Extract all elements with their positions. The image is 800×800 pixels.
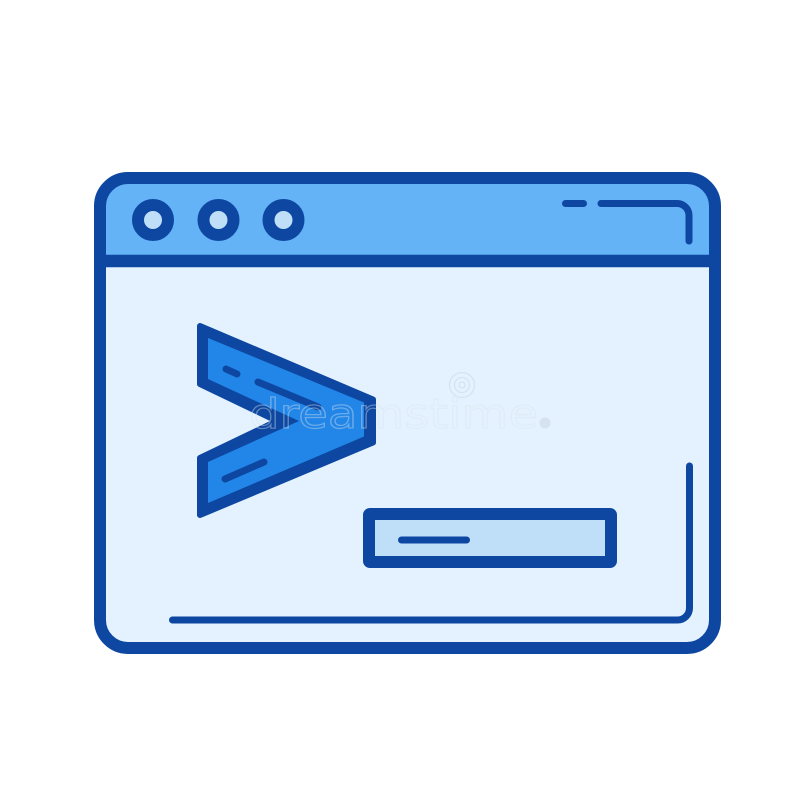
watermark dot — [540, 418, 550, 428]
watermark logo spiral — [450, 372, 474, 398]
panel: window body — [100, 178, 715, 648]
panel: window outline — [100, 178, 715, 648]
input box — [369, 514, 611, 562]
icon: prompt chevron — [200, 326, 373, 515]
divider: title bar bottom edge — [100, 255, 715, 267]
panel: window title bar — [100, 178, 715, 261]
icon: window bottom right highlight stroke — [172, 466, 690, 620]
watermark wordmark: dreamstime — [249, 390, 538, 438]
icon: window control buttons — [138, 205, 298, 235]
watermark — [249, 372, 550, 438]
input field — [369, 514, 611, 562]
icon: title bar highlight strokes — [566, 204, 689, 241]
input text line — [402, 536, 466, 544]
chevron body — [208, 338, 364, 503]
chevron highlight strokes — [225, 369, 318, 479]
chevron outline — [200, 326, 373, 515]
